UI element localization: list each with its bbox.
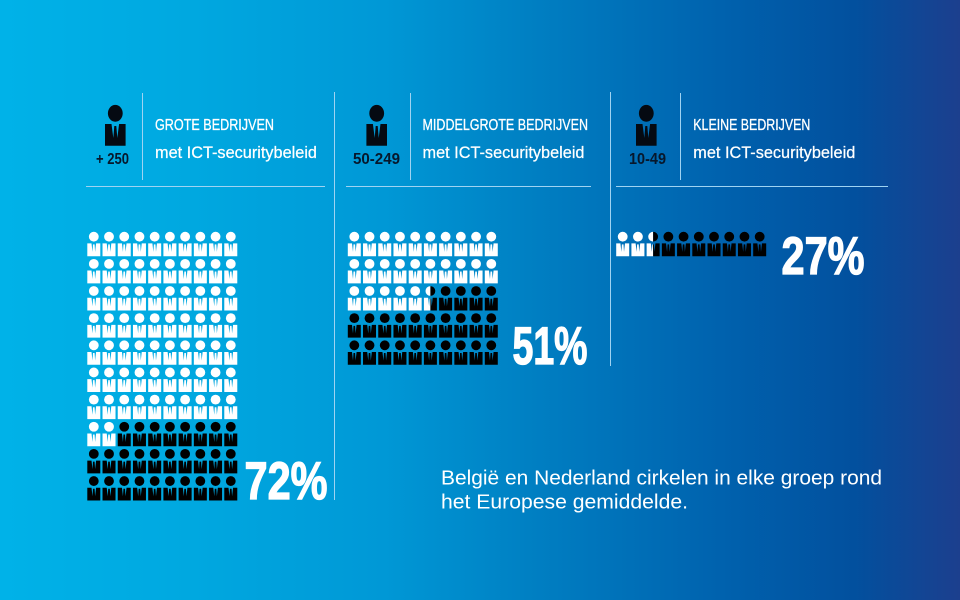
panel: grote bedrijven — [86, 93, 328, 511]
percentage: 72%: 72% — [244, 452, 328, 511]
note text — [441, 466, 882, 514]
header: kleine bedrijven — [616, 93, 888, 186]
subheading: met ICT-securitybeleid — [693, 143, 855, 162]
percentage: 51%: 51% — [512, 317, 588, 376]
note text: België en Nederland cirkelen in elke groep rond — [441, 466, 882, 490]
subheading: met ICT-securitybeleid — [422, 143, 584, 162]
size label: 50-249 — [353, 151, 400, 168]
column divider 1 — [334, 92, 336, 500]
pictogram chart: 27% — [616, 232, 766, 256]
icon: person large — [105, 105, 126, 146]
icon: person large — [366, 105, 387, 146]
pictogram chart: 72% — [87, 232, 237, 501]
subheading: met ICT-securitybeleid — [155, 143, 317, 162]
heading: MIDDELGROTE BEDRIJVEN — [422, 117, 588, 134]
note text: het Europese gemiddelde. — [441, 490, 688, 514]
column divider 2 — [610, 92, 612, 366]
size label: + 250 — [96, 151, 129, 168]
size label: 10-49 — [629, 151, 666, 168]
header: grote bedrijven — [86, 93, 325, 186]
heading: KLEINE BEDRIJVEN — [693, 117, 810, 134]
panel: middelgrote bedrijven — [346, 93, 591, 376]
header: middelgrote bedrijven — [346, 93, 591, 186]
icon: person large — [636, 105, 657, 146]
pictogram chart: 51% — [348, 232, 498, 365]
percentage: 27%: 27% — [782, 227, 864, 286]
heading: GROTE BEDRIJVEN — [155, 117, 274, 134]
panel: kleine bedrijven — [616, 93, 888, 286]
